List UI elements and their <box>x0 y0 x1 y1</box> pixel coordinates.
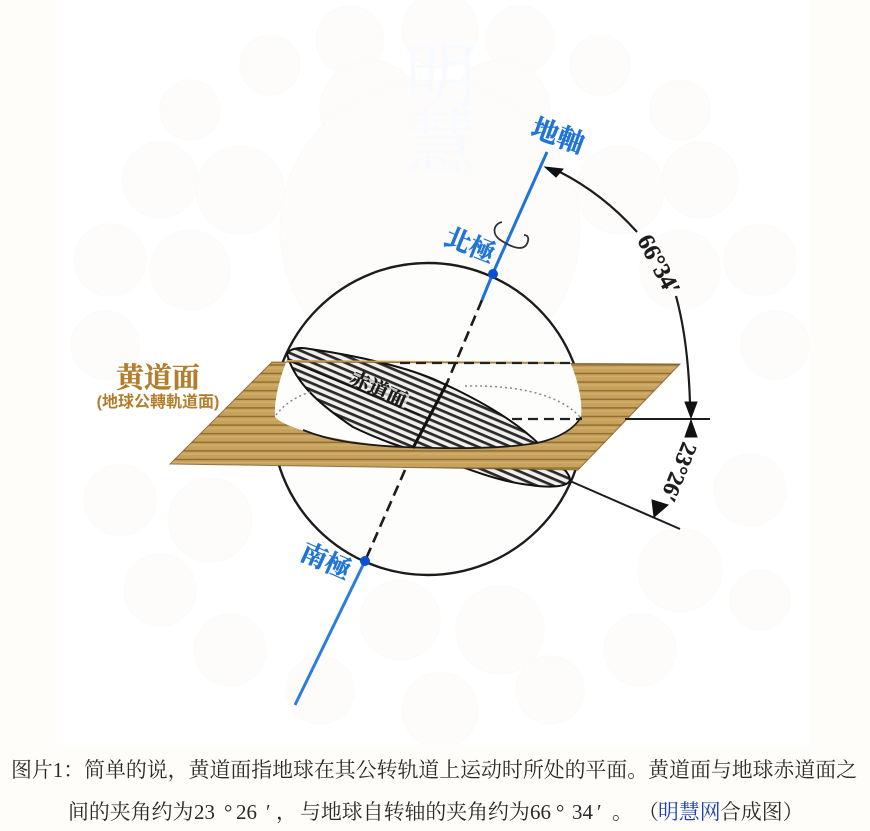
ecliptic plane outline <box>170 362 680 470</box>
earth sphere <box>272 263 584 575</box>
label: 地球公轉軌道面: (地球公轉軌道面) <box>97 392 219 411</box>
earth axis <box>295 152 547 705</box>
ecliptic plane with cutout <box>170 360 680 470</box>
arc 66°34' <box>545 167 697 418</box>
angle label 66°34': 66°34′ <box>631 230 685 300</box>
equatorial plane label: 赤道面 <box>346 367 410 412</box>
rotation arrow <box>494 222 528 248</box>
caption line 2: 明慧网 <box>658 800 721 824</box>
equatorial plane disc <box>287 348 570 487</box>
caption line 2: ′ <box>266 800 271 824</box>
caption line 2: 与地球自转轴的夹角约为 <box>300 800 530 824</box>
caption line 2: 23 <box>194 800 215 824</box>
arc 23°26' with arrows <box>570 419 710 529</box>
caption line 2: ， <box>276 800 297 824</box>
caption line 2: （ <box>638 800 659 824</box>
hidden lines <box>276 363 582 419</box>
caption line 2: 。 <box>612 800 633 824</box>
label: 南極: 南極 <box>296 537 356 585</box>
caption line 2: 间的夹角约为 <box>68 800 193 824</box>
caption line 2: ′ <box>597 800 602 824</box>
label: 北極: 北極 <box>440 221 500 269</box>
background panel <box>58 0 810 745</box>
caption line 1: 图片1：简单的说，黄道面指地球在其公转轨道上运动时所处的平面。黄道面与地球赤道面之 <box>11 758 857 782</box>
caption line 2: 26 <box>236 800 257 824</box>
caption line 2: ° <box>556 800 564 824</box>
caption line 2: 34 <box>572 800 593 824</box>
north pole dot <box>488 269 498 279</box>
label: 黄道面: 黄道面 <box>116 362 200 394</box>
angle label 23°26': 23°26′ <box>655 439 702 505</box>
south pole dot <box>360 556 370 566</box>
label: 地軸: 地軸 <box>527 113 589 159</box>
caption line 2 <box>68 800 804 824</box>
caption line 2: 合成图） <box>720 800 804 824</box>
watermark: 明: 明 <box>405 38 477 118</box>
caption line 2: 66 <box>530 800 551 824</box>
cutout rim <box>303 417 581 448</box>
watermark: clouds <box>71 0 809 748</box>
caption line 2: ° <box>224 800 232 824</box>
watermark: 慧: 慧 <box>405 104 477 184</box>
